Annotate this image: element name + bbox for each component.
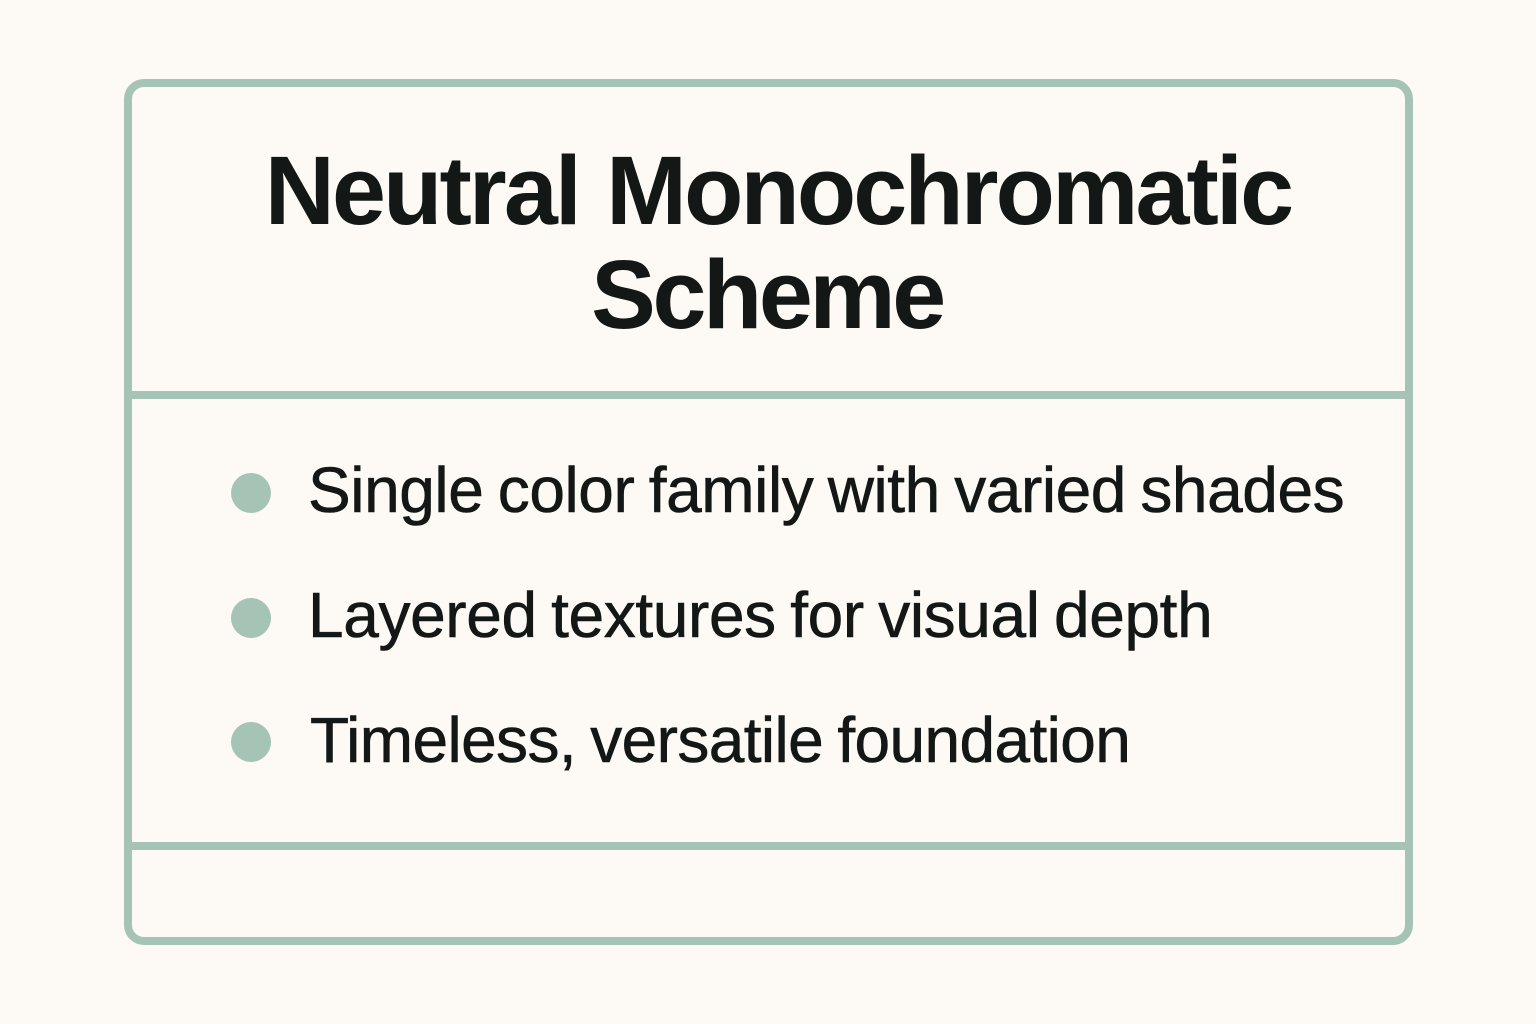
bullet list [231, 454, 1344, 776]
text: bullet 1: Single color family with varied shades [308, 454, 1344, 526]
icon: bullet 3 [231, 722, 271, 762]
panel: card frame [124, 79, 1413, 945]
heading: title: Scheme [591, 240, 943, 349]
heading: title [265, 136, 1292, 349]
icon: bullet 2 [231, 598, 271, 638]
text: bullet 2: Layered textures for visual depth [308, 579, 1212, 651]
icon: bullet 1 [231, 473, 271, 513]
text: bullet 3: Timeless, versatile foundation [310, 704, 1130, 776]
heading: title: Neutral Monochromatic [265, 136, 1291, 245]
